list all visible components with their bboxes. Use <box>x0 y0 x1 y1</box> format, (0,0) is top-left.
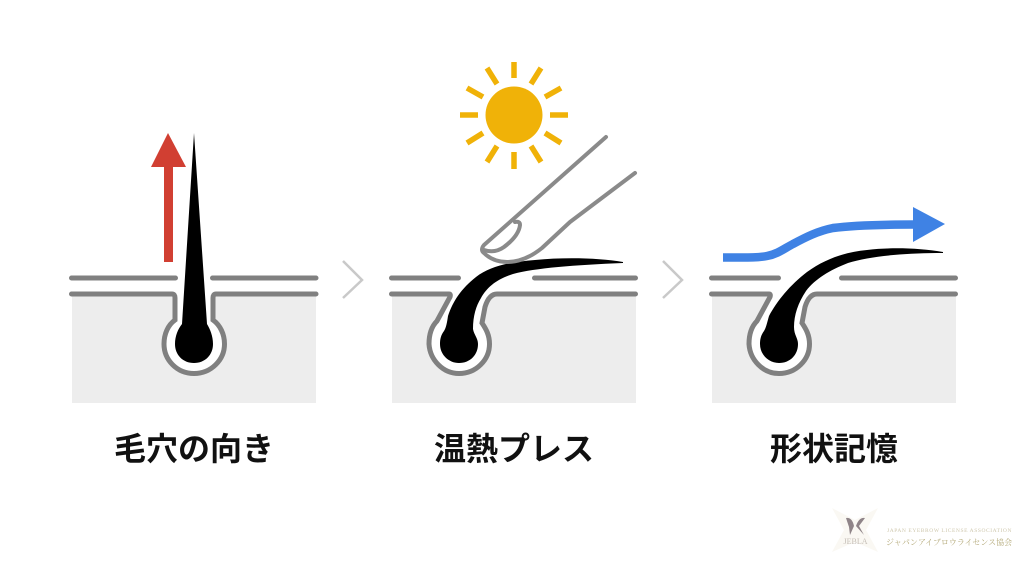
association Japanese name: ジャパンアイブロウライセンス協会 <box>886 537 1012 547</box>
skin block <box>712 295 956 403</box>
blue arrow <box>723 207 945 258</box>
red arrow <box>151 133 186 262</box>
hair <box>175 133 213 363</box>
arrow: chevron 1 <box>343 261 362 298</box>
hair <box>760 248 943 363</box>
panel: 形状記憶 <box>712 207 956 403</box>
icon: finger <box>482 137 635 262</box>
icon: sun <box>460 62 568 169</box>
skin surface line <box>72 276 316 280</box>
heading: 形状記憶: 形状記憶 <box>770 431 898 467</box>
skin block <box>392 295 636 403</box>
icon: butterfly <box>846 518 865 535</box>
association English name: JAPAN EYEBROW LICENSE ASSOCIATION <box>887 528 1012 534</box>
logo: JEBLA watermark <box>832 508 1012 552</box>
follicle outline <box>72 294 316 374</box>
logo glow <box>832 508 878 552</box>
arrow: chevron 2 <box>663 261 682 298</box>
panel: 毛穴の向き <box>72 133 316 403</box>
hair <box>440 258 623 363</box>
heading: 毛穴の向き: 毛穴の向き <box>114 431 274 467</box>
skin block <box>72 295 316 403</box>
skin surface line <box>392 276 636 280</box>
logo letters: JEBLA <box>844 537 868 546</box>
skin surface line <box>712 276 956 280</box>
follicle outline <box>712 294 956 374</box>
panel: 温熱プレス <box>392 62 636 403</box>
heading: 温熱プレス: 温熱プレス <box>434 431 594 467</box>
follicle outline <box>392 294 636 374</box>
